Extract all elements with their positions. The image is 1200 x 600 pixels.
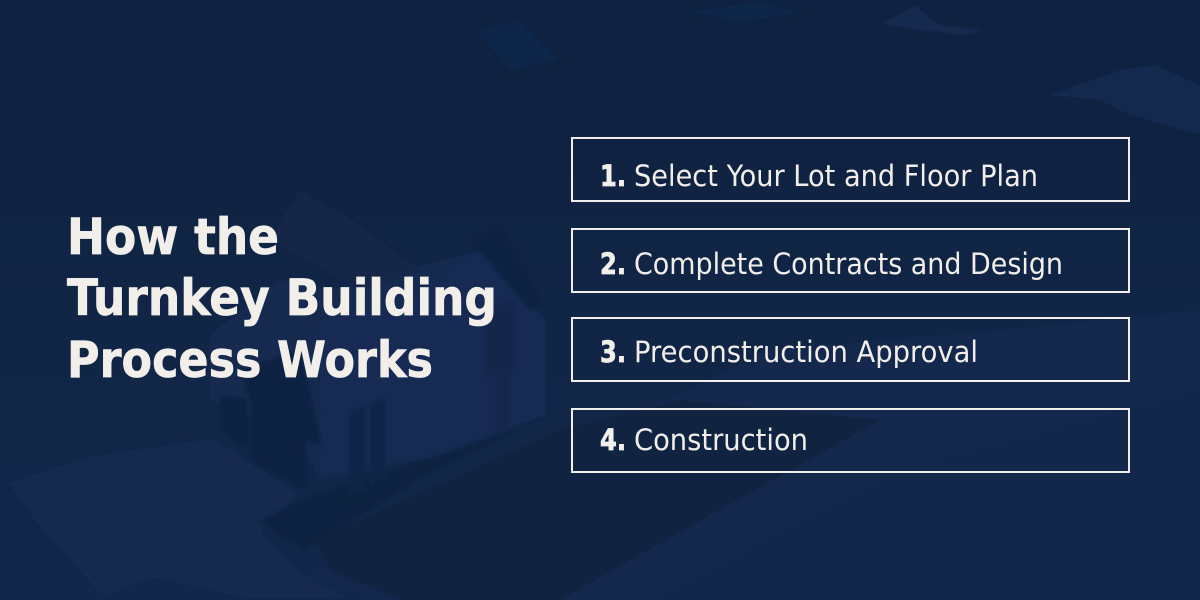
title: How the (67, 208, 279, 266)
distant houses (885, 6, 985, 35)
step 3 box (572, 318, 1129, 381)
title: Turnkey Building (67, 269, 497, 327)
house walls (210, 250, 545, 480)
step 2 box (572, 229, 1129, 292)
step 4 box (572, 409, 1129, 472)
step 3 box: Preconstruction Approval (634, 335, 978, 369)
step 1 box (572, 138, 1129, 201)
step 2 box: 2. (600, 247, 626, 281)
step 1 box: 1. (600, 159, 626, 193)
dark planting bed (258, 430, 520, 550)
house front (320, 250, 545, 478)
title: Process Works (67, 331, 433, 389)
step 4 box: Construction (634, 423, 808, 457)
lower right lawn (650, 390, 1200, 600)
roofs (270, 190, 420, 290)
garage doors (220, 395, 248, 450)
step 1 box: Select Your Lot and Floor Plan (634, 159, 1038, 193)
step 2 box: Complete Contracts and Design (634, 247, 1063, 281)
step 4 box: 4. (600, 423, 626, 457)
title (67, 208, 497, 389)
windows (349, 405, 365, 495)
sidewalk (306, 310, 1200, 600)
dark lawn (316, 400, 880, 600)
step 3 box: 3. (600, 335, 626, 369)
driveway (8, 439, 350, 598)
